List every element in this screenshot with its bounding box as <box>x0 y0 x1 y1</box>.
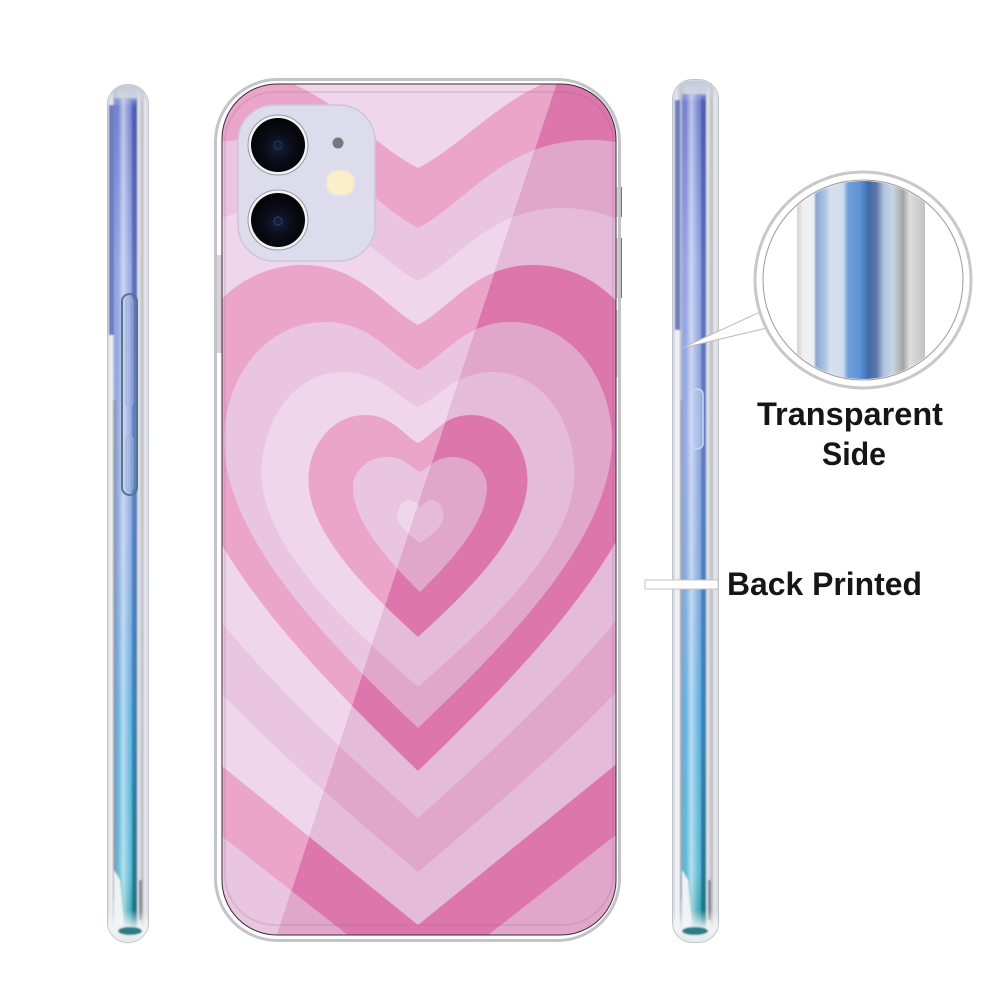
icon: left side buttons <box>122 294 137 495</box>
callout pointer <box>682 312 767 348</box>
label: side: Side <box>822 436 886 472</box>
label: back printed: Back Printed <box>727 566 922 602</box>
magnified stripes <box>797 180 925 380</box>
label: transparent side: Transparent <box>757 396 943 432</box>
icon: lower lens <box>248 190 308 250</box>
icon: microphone dot <box>332 138 344 148</box>
printed heart artwork <box>222 84 616 934</box>
left side view of case <box>108 84 148 942</box>
magnifier circle <box>755 172 971 388</box>
right side view of case <box>672 80 718 942</box>
camera module <box>238 105 375 261</box>
side buttons seen through case <box>214 187 622 377</box>
icon: upper lens <box>248 115 308 175</box>
icon: right side button <box>692 389 703 449</box>
icon: flash <box>327 171 354 195</box>
magnified callout: transparent side <box>682 172 971 388</box>
back printed pointer <box>645 580 718 589</box>
transparent case frame <box>216 80 620 940</box>
phone case back <box>214 78 622 942</box>
